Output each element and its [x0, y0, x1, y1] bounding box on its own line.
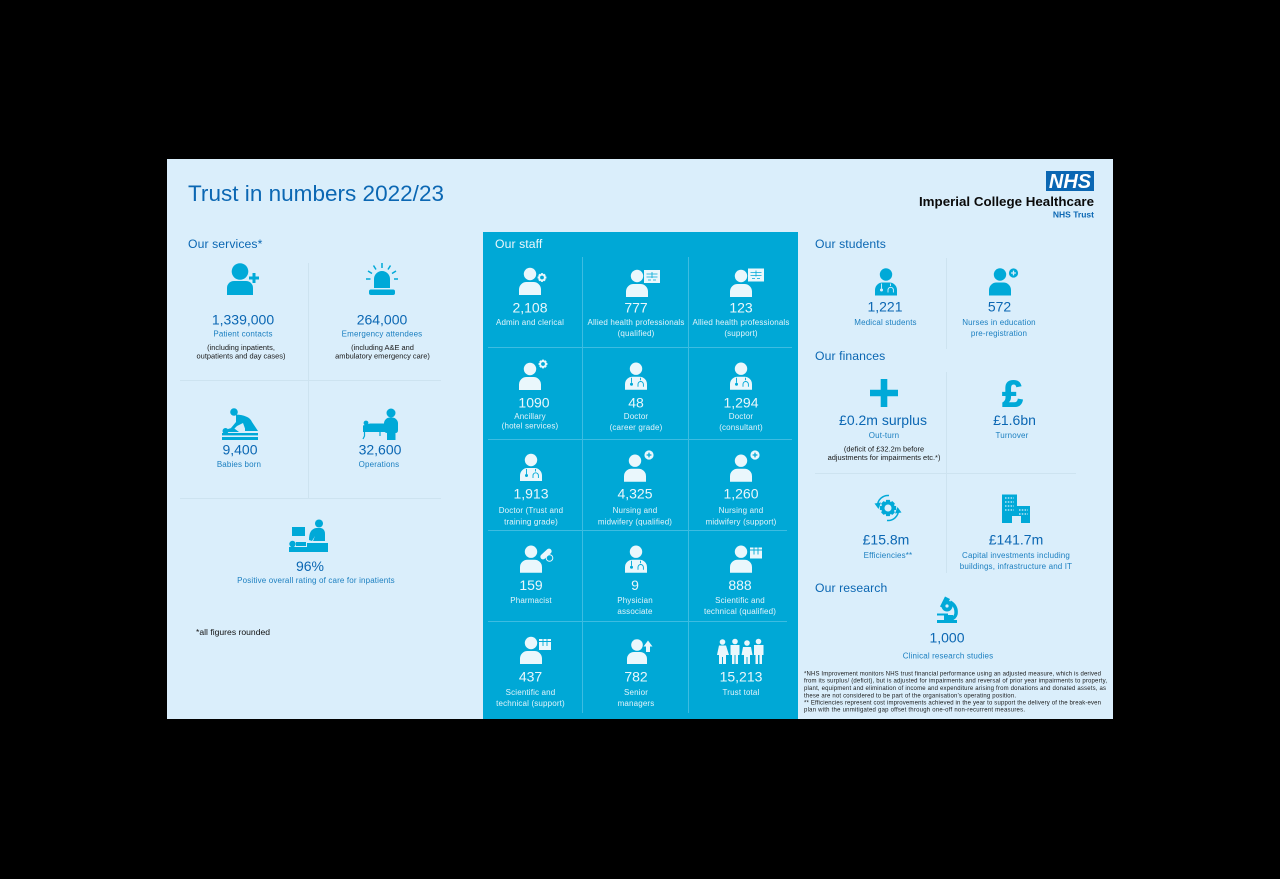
panel: our staff	[483, 232, 798, 719]
label: Ancillary	[514, 412, 546, 421]
value: 437	[519, 668, 542, 684]
value: 1,000	[929, 630, 965, 646]
stat: nursing qualified	[598, 450, 672, 526]
icon: person with test tubes	[520, 637, 551, 664]
label: Capital investments including	[962, 551, 1070, 560]
footnotes	[804, 672, 1107, 714]
value: £15.8m	[863, 532, 909, 548]
label: Operations	[359, 460, 399, 469]
panel: our services	[180, 237, 441, 637]
label: buildings, infrastructure and IT	[960, 562, 1072, 571]
value: 1,339,000	[212, 312, 274, 328]
icon: doctor	[875, 268, 897, 296]
icon: four staff figures	[717, 639, 764, 664]
icon: doctor	[520, 454, 542, 481]
stat: AHP qualified	[588, 270, 684, 338]
label: Allied health professionals	[692, 318, 790, 327]
label: Clinical research studies	[903, 652, 993, 660]
note: (including A&E and	[351, 343, 414, 352]
stat: turnover	[993, 374, 1036, 440]
value: 9	[631, 577, 639, 593]
value: 48	[628, 394, 644, 410]
label: (career grade)	[610, 423, 663, 432]
stat: scientific qualified	[704, 546, 776, 616]
label: Allied health professionals	[588, 318, 684, 327]
note: (including inpatients,	[207, 343, 275, 352]
label: Out-turn	[869, 431, 899, 440]
value: 96%	[296, 558, 324, 574]
label	[618, 688, 654, 708]
footnotes: *NHS Improvement monitors NHS trust financial performance using an adjusted measure, which is derived	[804, 672, 1101, 678]
stat: pharmacist	[510, 546, 553, 605]
label: midwifery (qualified)	[598, 518, 672, 526]
icon: doctor	[730, 362, 752, 390]
icon: buildings	[1002, 494, 1030, 523]
stat: ancillary	[502, 360, 559, 430]
label: Patient contacts	[213, 330, 273, 338]
icon: nurse	[989, 268, 1018, 296]
value: 1,221	[867, 298, 903, 314]
label	[719, 412, 763, 432]
label	[598, 506, 672, 526]
label: (support)	[724, 329, 758, 338]
value: £141.7m	[989, 532, 1043, 548]
logo: Imperial College Healthcare NHS Trust: NHS Trust	[1053, 210, 1094, 220]
value: 1,294	[723, 394, 759, 410]
icon: nurse	[624, 450, 654, 482]
footnote: rounded: *all figures rounded	[196, 627, 270, 637]
label: Doctor	[729, 412, 753, 421]
label: Efficiencies**	[864, 551, 912, 560]
label: managers	[618, 699, 654, 708]
icon: person with gear	[519, 268, 546, 295]
stat: medical students	[854, 268, 917, 327]
note	[197, 343, 286, 360]
value: 1,913	[513, 486, 549, 502]
value: 782	[624, 668, 648, 684]
label: (qualified)	[618, 329, 655, 338]
stat: senior managers	[618, 639, 654, 708]
stat: operations	[359, 408, 402, 469]
value: 4,325	[617, 486, 653, 502]
icon: person with x-ray board	[730, 268, 764, 297]
label: technical (support)	[496, 699, 565, 708]
icon: gear with arrows	[874, 495, 902, 521]
icon: person with gear	[519, 360, 547, 390]
stat: babies born	[217, 408, 261, 469]
note: outpatients and day cases)	[197, 352, 286, 360]
stat: trust total	[717, 639, 764, 697]
label	[960, 551, 1072, 571]
label: associate	[617, 607, 653, 616]
value: 123	[729, 300, 753, 316]
panel: our research	[815, 581, 993, 660]
heading: our staff: Our staff	[495, 237, 543, 251]
panel: our students	[815, 237, 1036, 349]
label: training grade)	[504, 518, 558, 526]
stat: admin	[496, 268, 564, 327]
icon: patient with plus	[227, 263, 259, 295]
stat: efficiencies	[863, 495, 912, 560]
icon: surgeon and patient	[363, 408, 398, 440]
label: technical (qualified)	[704, 607, 776, 616]
value: 572	[988, 298, 1011, 314]
label	[496, 688, 565, 708]
stat: emergency attendees	[335, 263, 430, 360]
poster background	[167, 159, 1113, 719]
stat: scientific support	[496, 637, 565, 708]
stat: doctor career grade	[610, 362, 663, 432]
icon: parent changing baby	[222, 408, 258, 440]
label: Physician	[617, 596, 653, 605]
label: Doctor	[624, 412, 648, 421]
note: ambulatory emergency care)	[335, 352, 430, 360]
logo: Imperial College Healthcare NHS Trust	[919, 171, 1094, 220]
label: Senior	[624, 688, 648, 697]
icon: person with x-ray board	[626, 270, 660, 297]
title: Trust in numbers 2022/23	[188, 181, 444, 206]
stat: capital investments	[960, 494, 1072, 571]
label: Positive overall rating of care for inpatients	[237, 576, 395, 585]
note: (deficit of £32.2m before	[844, 444, 924, 454]
label	[692, 318, 790, 338]
stat: nurses in education	[962, 268, 1036, 338]
label	[499, 506, 563, 526]
stat: physician associate	[617, 546, 653, 616]
footnotes: ** Efficiencies represent cost improvements achieved in the year to support the delivery of the break-even	[804, 700, 1101, 706]
label	[962, 318, 1036, 338]
stat: AHP support	[692, 268, 790, 338]
stat: doctor consultant	[719, 362, 763, 432]
label: Trust total	[723, 688, 760, 697]
label: midwifery (support)	[706, 518, 777, 526]
value: 15,213	[720, 668, 763, 684]
icon: doctor	[625, 362, 647, 390]
label: Emergency attendees	[342, 330, 422, 338]
label: (hotel services)	[502, 422, 559, 430]
value: 2,108	[512, 300, 548, 316]
label	[617, 596, 653, 616]
label: Nursing and	[719, 506, 763, 515]
stat: positive rating	[237, 520, 395, 585]
value: 1,260	[723, 486, 759, 502]
label: Admin and clerical	[496, 318, 564, 327]
logo: Imperial College Healthcare NHS Trust: NHS	[1049, 171, 1092, 193]
note	[828, 444, 941, 462]
value: 777	[624, 300, 648, 316]
value: 1090	[518, 394, 550, 410]
label	[610, 412, 663, 432]
stat: doctor trust grade	[499, 454, 563, 526]
panel: our finances	[815, 349, 1076, 573]
icon: pound sign: £	[1002, 374, 1023, 414]
value: £1.6bn	[993, 412, 1036, 428]
footnotes: from its surplus/ (deficit), but is adjusted for impairments and reversal of prior year impairments to property,	[804, 679, 1107, 685]
label: Turnover	[996, 431, 1029, 440]
label: pre-registration	[971, 329, 1027, 338]
value: 264,000	[357, 312, 408, 328]
icon: microscope	[937, 596, 957, 623]
icon: person with pills	[520, 546, 553, 573]
stat: surplus	[828, 379, 941, 462]
value: 32,600	[359, 442, 402, 458]
icon: doctor	[625, 546, 647, 573]
logo: Imperial College Healthcare NHS Trust: Imperial College Healthcare	[919, 194, 1094, 209]
heading: our research: Our research	[815, 581, 887, 595]
stat: nursing support	[706, 450, 777, 526]
label: Pharmacist	[510, 596, 552, 605]
footnotes: plan with the unmitigated gap offset through one-off non-recurrent measures.	[804, 708, 1025, 714]
label	[588, 318, 684, 338]
label: (consultant)	[719, 423, 763, 432]
heading: our students: Our students	[815, 237, 886, 251]
icon: person with test tubes	[730, 546, 762, 573]
label: Scientific and	[506, 688, 555, 697]
note: adjustments for impairments etc.*)	[828, 453, 941, 462]
icon: plus	[870, 379, 898, 407]
label	[704, 596, 776, 616]
value: 888	[728, 577, 752, 593]
icon: siren	[366, 263, 398, 295]
stat: patient contacts	[197, 263, 286, 360]
label: Scientific and	[715, 596, 765, 605]
label: Doctor (Trust and	[499, 506, 563, 515]
icon: carer at bedside	[289, 520, 328, 552]
footnotes: these are not considered to be part of the organisation’s operating position.	[804, 693, 1016, 699]
label: Nursing and	[613, 506, 657, 515]
label: Babies born	[217, 460, 261, 469]
value: 9,400	[222, 442, 258, 458]
value: 159	[519, 577, 543, 593]
label: Medical students	[854, 318, 917, 327]
label	[502, 412, 559, 430]
icon: person with up arrow	[627, 639, 652, 664]
heading: our services: Our services*	[188, 237, 263, 251]
heading: our finances: Our finances	[815, 349, 885, 363]
value: £0.2m surplus	[839, 412, 927, 428]
label: Nurses in education	[962, 318, 1036, 327]
note	[335, 343, 430, 360]
footnotes: plant, equipment and elimination of income and expenditure arising from donations and donated assets, as	[804, 686, 1106, 692]
label	[706, 506, 777, 526]
icon: nurse	[730, 450, 760, 482]
